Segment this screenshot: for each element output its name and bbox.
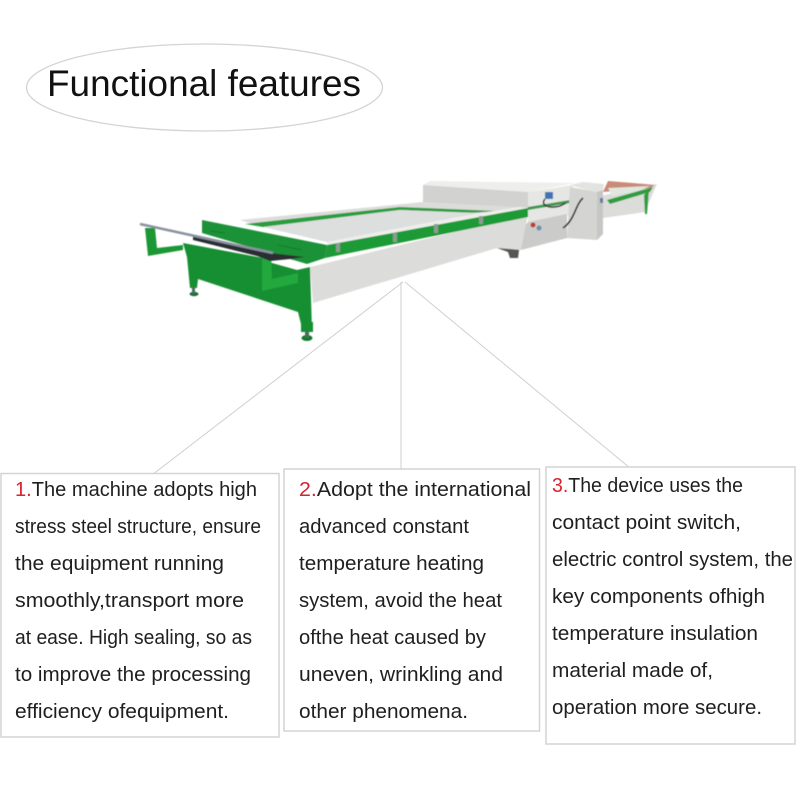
- panel: feature 1: [1, 474, 279, 737]
- feature 3 text: key components ofhigh: [552, 586, 765, 608]
- panel: feature 2: [284, 469, 540, 731]
- feature 2 text: other phenomena.: [299, 701, 468, 723]
- feature 1 text: at ease. High sealing, so as: [15, 627, 252, 649]
- feature 3 text: [552, 475, 793, 719]
- feature 3 text: electric control system, the: [552, 549, 793, 571]
- base frame with legs: [140, 224, 313, 341]
- feature 1 text: 1.The machine adopts high: [15, 479, 257, 501]
- table frame and mesh: [202, 202, 528, 264]
- grey side panel: [310, 214, 528, 303]
- callout line to box 2: [400, 282, 402, 469]
- heating press box: [423, 181, 575, 258]
- feature 3 text: material made of,: [552, 660, 713, 682]
- feature 1 text: the equipment running: [15, 553, 224, 575]
- feature 3 text: operation more secure.: [552, 697, 762, 719]
- feature 1 text: stress steel structure, ensure: [15, 516, 261, 538]
- feature 2 text: ofthe heat caused by: [299, 627, 486, 649]
- panel: feature 3: [546, 467, 795, 744]
- machine illustration: [140, 181, 657, 341]
- feature 2 text: advanced constant: [299, 516, 469, 538]
- feature 3 text: 3.The device uses the: [552, 475, 743, 497]
- feature 2 text: [299, 479, 531, 723]
- feature 1 text: to improve the processing: [15, 664, 251, 686]
- right extension table: [600, 181, 657, 218]
- feature 1 text: [15, 479, 261, 723]
- feature 3 text: temperature insulation: [552, 623, 758, 645]
- feature 2 text: 2.Adopt the international: [299, 479, 531, 501]
- feature 2 text: temperature heating: [299, 553, 484, 575]
- callout line to box 3: [405, 282, 630, 468]
- feature 3 text: contact point switch,: [552, 512, 741, 534]
- title: Functional features: [47, 63, 361, 104]
- control cabinet: [563, 182, 604, 240]
- callout line to box 1: [148, 282, 403, 478]
- title badge: [26, 44, 382, 131]
- feature 2 text: system, avoid the heat: [299, 590, 502, 612]
- feature 2 text: uneven, wrinkling and: [299, 664, 503, 686]
- feature 1 text: smoothly,transport more: [15, 590, 244, 612]
- feature 1 text: efficiency ofequipment.: [15, 701, 229, 723]
